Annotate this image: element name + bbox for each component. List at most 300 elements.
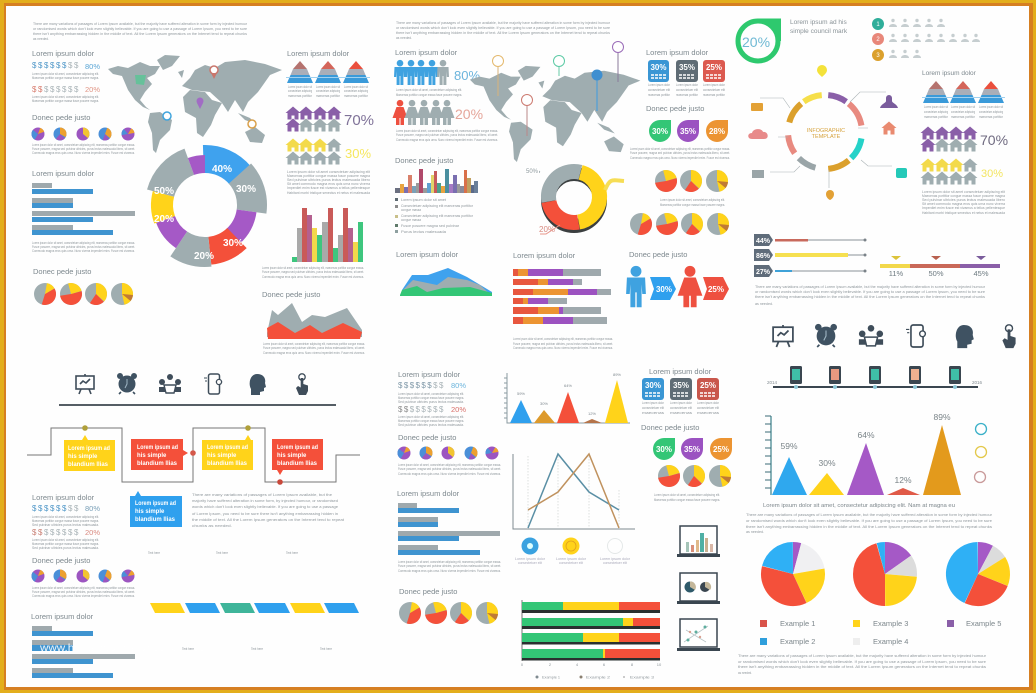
caption: [630, 147, 730, 160]
caption: [513, 337, 613, 350]
badge captions: [642, 401, 720, 415]
badge captions: maecenas porttitor: [676, 93, 699, 97]
3D donut chart: 20%: [539, 225, 555, 234]
circular infographic: INFOGRAPHIC: [807, 128, 845, 134]
caption: or randomised words which don't look even slightly believable. If you are going to use a passage of Lorem Ipsum, you need to be sure: [755, 290, 985, 294]
pyramid captions: Lorem ipsum dolor sit: [288, 85, 312, 89]
subtitle: simple council mark: [790, 28, 848, 35]
percent badges: [648, 60, 725, 82]
caption: Maecenas porttitor congue massa fusce posuere magna.: [32, 76, 99, 80]
currency row red: [398, 405, 466, 414]
intro text: as needed.: [396, 36, 412, 40]
caption: Lorem ipsum dolor sit amet, consectetuer adipiscing elit, maecenas porttitor congue massa.: [398, 560, 501, 564]
text block: or randomised words which don't look even slightly believable. If you are going to use a passage of Lorem Ipsum, you need to be sure: [746, 519, 992, 523]
caption: [263, 342, 365, 355]
badge captions: consectetuer elit: [697, 406, 719, 410]
stacked bar legend: Example 3: [630, 676, 654, 680]
horizontal stacked bars: 2: [549, 662, 552, 667]
caption: Lorem ipsum dolor sit amet, consectetuer adipiscing elit.: [32, 72, 99, 76]
round percent badges: 35%: [684, 445, 700, 454]
caption: Habitant morbi tristique senectus et netus et malesuada: [922, 211, 1005, 215]
round icons with captions: consectetuer elit: [603, 561, 627, 565]
caption: Fusce posuere, magna sed pulvinar ultricies, purus lectus malesuada libero, sit amet.: [32, 590, 135, 594]
currency row red 20%: [32, 85, 100, 94]
caption: [32, 515, 99, 527]
panel: top middle infographic: [392, 21, 730, 350]
pyramid captions: [288, 85, 369, 98]
caption: Maecenas porttitor congue massa fusce posuere magna.: [396, 93, 462, 97]
progress bars with tags: [754, 234, 866, 277]
bullet legend: congue massa: [401, 218, 421, 222]
caption: Lorem ipsum dolor sit amet, consectetuer adipiscing elit.: [32, 95, 99, 99]
pie legend: [760, 619, 1001, 646]
process box 2: [131, 439, 188, 470]
process box 3: [202, 435, 253, 470]
caption: Fusce posuere, magna sed pulvinar ultricies, purus lectus malesuada libero, sit amet.: [262, 270, 364, 274]
laptop with pies: [677, 573, 720, 604]
pyramid captions: consectetuer adipiscing: [316, 89, 340, 93]
badge captions: maecenas: [642, 411, 664, 415]
caption: Sed pulvinar ultricies purus lectus malesuada.: [32, 546, 99, 550]
caption: Lorem ipsum dolor sit amet, consectetuer adipiscing elit.: [32, 538, 99, 542]
icon row: [76, 373, 308, 395]
badge captions: Lorem ipsum dolor: [648, 83, 671, 87]
process box 3: blandium llias: [207, 461, 248, 467]
caption: Fusce posuere, magna sed pulvinar ultricies, purus lectus malesuada libero, sit amet.: [630, 151, 730, 155]
heading: people: Lorem ipsum dolor: [395, 48, 458, 57]
caption: Maecenas porttitor congue massa fusce posuere magna.: [32, 99, 99, 103]
pyramid captions: [924, 105, 1004, 119]
bullet legend: [395, 198, 474, 234]
badge captions: Lorem ipsum dolor: [676, 83, 699, 87]
pyramid captions: consectetuer adipiscing: [979, 110, 1003, 114]
badge captions: Lorem ipsum dolor: [703, 83, 726, 87]
caption: Sed pulvinar ultricies purus lectus malesuada libero: [287, 178, 370, 182]
numbered people rows: 3: [876, 53, 880, 59]
text block: [738, 654, 987, 675]
pyramid captions: maecenas porttitor: [344, 94, 369, 98]
heading: currency stats: Lorem ipsum dolor: [32, 49, 95, 58]
currency row blue: 80%: [451, 381, 466, 390]
caption: Commodo magna eros quis urna. Nunc viverra imperdiet enim. Fusce est vivamus.: [398, 569, 501, 573]
progress bars with tags: 27%: [756, 269, 771, 276]
caption: Imperdiet enim fusce est vivamus a tellus pellentesque: [922, 206, 1005, 210]
caption: Maecenas porttitor congue massa fusce posuere magna: [287, 174, 370, 178]
phone timeline: 2014: [767, 380, 778, 385]
currency row red: $ $ $ $ $ $ $ $: [398, 405, 444, 414]
currency row blue: $ $ $ $ $ $ $ $: [398, 381, 444, 390]
triangle chart: 64%: [564, 383, 572, 388]
process box 2: his simple: [137, 453, 167, 459]
bar chart colored: [292, 208, 363, 262]
pie legend: Example 2: [780, 637, 815, 646]
small grouped bar chart: [395, 168, 478, 193]
caption: [32, 72, 99, 80]
subtitle: Lorem ipsum ad his: [790, 19, 847, 26]
intro text: or randomised words which don't look even slightly believable. If you are going to use a passage of Lorem Ipsum, you need to be sure: [33, 27, 247, 31]
process box 3: his simple: [207, 453, 237, 459]
house pictogram 70%: 70%: [980, 132, 1008, 148]
caption: Fusce posuere, magna sed pulvinar ultricies, purus lectus malesuada libero, sit amet.: [396, 133, 498, 137]
caption: Maecenas porttitor congue massa fusce posuere magna.: [660, 203, 725, 207]
icons around circle: [748, 65, 907, 200]
pyramid captions: Lorem ipsum dolor sit: [344, 85, 368, 89]
pie row lower: [630, 213, 729, 235]
intro text: [396, 21, 611, 40]
timeline labels: [148, 551, 332, 651]
process box 5: blandium llias: [135, 517, 176, 523]
pyramid captions: consectetuer adipiscing: [924, 110, 948, 114]
pyramid icons: [286, 61, 370, 83]
stacked bar legend: Example 1: [542, 676, 560, 680]
pie row: [658, 465, 731, 487]
timeline labels: Text here: [182, 647, 194, 651]
bullet legend: Consectetuer adipiscing elit maecenas porttitor: [401, 214, 474, 218]
small pie row: [398, 446, 498, 460]
caption: Lorem ipsum dolor sit amet, consectetuer adipiscing elit, maecenas porttitor congue massa.: [398, 463, 501, 467]
currency row red: $ $ $ $ $ $ $ $: [32, 528, 79, 537]
process dots: [82, 425, 283, 485]
horizontal stacked bars: 4: [576, 662, 579, 667]
bullet legend: Fusce posuere magna sed pulvinar: [401, 224, 460, 228]
caption: Lorem ipsum dolor sit amet, consectetuer adipiscing elit, maecenas porttitor congue massa.: [263, 342, 365, 346]
heading: badges: Lorem ipsum dolor: [646, 48, 709, 57]
people pictogram 80%: [394, 60, 480, 85]
bar chart: [32, 626, 135, 678]
gender figures with chevrons: [626, 266, 729, 307]
pyramid captions: maecenas porttitor: [316, 94, 341, 98]
pyramid captions: Lorem ipsum dolor sit: [979, 105, 1003, 109]
currency row red: 20%: [85, 528, 100, 537]
caption: Habitant morbi tristique senectus et netus et malesuada: [287, 191, 370, 195]
stacked bar legend: [536, 676, 654, 680]
house pictogram 30%: [286, 138, 371, 164]
heading: big pies: Donec pede justo: [399, 587, 457, 596]
phone timeline: [767, 366, 983, 389]
laptop with bars: [677, 526, 720, 557]
donut chart: 40%: [212, 164, 232, 175]
text block: majority have suffered alteration in some form, by injected humour, or randomised: [192, 498, 338, 503]
caption: Lorem ipsum dolor sit amet consectetuer adipiscing elit: [922, 190, 1005, 194]
caption: Lorem ipsum dolor sit amet, consectetuer adipiscing elit.: [398, 392, 464, 396]
text block: There are many variations of passages of Lorem Ipsum available, but the majority have suffered alteration in some form by injected humour: [746, 513, 993, 517]
round percent badges: [653, 438, 732, 460]
currency row blue 80%: $ $ $ $ $ $ $ $: [32, 61, 79, 70]
heading: small bars: Donec pede justo: [395, 156, 453, 165]
icon row: [773, 324, 1016, 348]
caption: Maecenas porttitor congue massa fusce posuere magna.: [32, 542, 99, 546]
bullet legend: Purus lectus malesuada: [401, 230, 446, 234]
pyramid captions: maecenas porttitor: [288, 94, 313, 98]
caption: [654, 493, 720, 502]
heading: small pies: Donec pede justo: [398, 433, 456, 442]
caption: [32, 241, 135, 253]
legend circles: [974, 424, 986, 482]
currency row blue 80%: 80%: [85, 62, 100, 71]
currency row blue: 80%: [85, 504, 100, 513]
horizontal stacked bars: 6: [603, 662, 606, 667]
round percent badges: 35%: [680, 127, 696, 136]
bullet legend: Consectetuer adipiscing elit maecenas porttitor: [401, 204, 474, 208]
segmented bar: 11%: [889, 269, 904, 278]
area chart: [267, 303, 362, 339]
caption: [396, 129, 498, 142]
round icons with captions: consectetuer elit: [559, 561, 583, 565]
process box 2: blandium llias: [137, 461, 178, 467]
caption: [262, 266, 364, 279]
circular infographic: [760, 80, 892, 188]
process box 3: Lorem ipsum ad: [207, 445, 248, 451]
percent badges: 35%: [679, 63, 695, 72]
panel: bottom left infographic: [27, 373, 360, 678]
text block: There are many variations of passages of Lorem Ipsum available, but the: [192, 492, 333, 497]
heading: gender: Donec pede justo: [629, 250, 687, 259]
process box 5: his simple: [135, 509, 165, 515]
caption: [32, 143, 135, 155]
stacked area chart: [400, 268, 492, 296]
badge captions: maecenas porttitor: [648, 93, 671, 97]
bullet legend: Lorem ipsum dolor sit amet: [401, 198, 446, 202]
caption: Sit amet commodo magna eros quis urna nunc viverra: [922, 202, 1005, 206]
intro text: as needed.: [33, 37, 49, 41]
triangle chart: 64%: [857, 430, 875, 440]
timeline labels: Text here: [286, 551, 298, 555]
heading: pyramids: Lorem ipsum dolor: [287, 49, 350, 58]
caption: Sed pulvinar ultricies purus lectus malesuada.: [32, 523, 99, 527]
caption: there isn't anything embarrassing hidden in the middle of text. All the Lorem Ipsum generators on the Internet tend to repeat chunks: [755, 295, 985, 299]
process box 1: blandium llias: [68, 462, 109, 468]
caption: Commodo magna eros quis urna. Nunc viverra imperdiet enim. Fusce est vivamus.: [513, 346, 613, 350]
green percent ring: 20%: [742, 34, 770, 50]
text block: the middle of text. All the Lorem Ipsum generators on the Internet tend to repeat: [192, 517, 345, 522]
caption: Fusce posuere, magna sed pulvinar ultricies, purus lectus malesuada libero, sit amet.: [513, 342, 613, 346]
triangle chart: [504, 372, 630, 423]
progress bars with tags: 86%: [756, 253, 771, 260]
panel: top left infographic: [32, 22, 374, 355]
caption: Fusce posuere, magna sed pulvinar ultricies, purus lectus malesuada libero, sit amet.: [32, 245, 135, 249]
pyramid captions: maecenas porttitor: [924, 115, 949, 119]
round icons with captions: Lorem ipsum dolor: [515, 557, 546, 561]
panel: top right infographic: [738, 18, 1008, 306]
bar chart: [398, 503, 500, 555]
parallelogram timeline: [150, 603, 359, 613]
caption: Fusce posuere, magna sed pulvinar ultricies, purus lectus malesuada libero, sit amet.: [398, 564, 501, 568]
caption: Fusce posuere, magna sed pulvinar ultricies, purus lectus malesuada libero, sit amet.: [398, 467, 501, 471]
house pictogram 70%: [920, 126, 1008, 152]
numbered people rows: 2: [876, 37, 880, 43]
donut chart: 30%: [236, 184, 256, 195]
text block: as needed.: [746, 530, 764, 534]
caption: [32, 95, 99, 103]
caption: [398, 415, 464, 427]
percent badges: 30%: [650, 63, 667, 72]
currency row red: 20%: [451, 405, 466, 414]
gender figures with chevrons: 25%: [708, 285, 724, 294]
percent badges: 30%: [645, 381, 661, 390]
triangle chart: [765, 412, 961, 495]
caption: Sed pulvinar ultricies purus lectus malesuada.: [398, 423, 464, 427]
process box 1: [64, 435, 115, 471]
process box 4: [272, 439, 323, 475]
pyramid captions: maecenas porttitor: [979, 115, 1004, 119]
people pictogram 80%: 80%: [454, 68, 480, 83]
heading: area chart: Lorem ipsum dolor: [396, 250, 459, 259]
pie legend: Example 5: [966, 619, 1001, 628]
round icons with captions: Lorem ipsum dolor: [556, 557, 587, 561]
text block: there isn't anything embarrassing hidden in the middle of text. All the Lorem Ipsum generators on the Internet tend to repeat chunks: [746, 525, 992, 529]
heading: currency: Lorem ipsum dolor: [398, 370, 461, 379]
world map with pins: [470, 42, 640, 162]
caption: Commodo magna eros quis urna. Nunc viverra imperdiet enim. Fusce est vivamus.: [32, 249, 135, 253]
caption: [922, 190, 1005, 215]
caption: [398, 463, 501, 476]
caption: Maecenas porttitor congue massa fusce posuere magna.: [32, 519, 99, 523]
triangle chart: 89%: [613, 372, 621, 377]
caption: Commodo magna eros quis urna. Nunc viverra imperdiet enim. Fusce est vivamus.: [398, 472, 501, 476]
small pie row: [32, 128, 134, 140]
currency row red 20%: 20%: [85, 85, 100, 94]
caption: Commodo magna eros quis urna. Nunc viverra imperdiet enim. Fusce est vivamus.: [396, 138, 498, 142]
segmented bar: 45%: [973, 269, 989, 278]
pie legend: Example 1: [780, 619, 815, 628]
heading: currency: Lorem ipsum dolor: [32, 493, 95, 502]
triangle chart: 89%: [933, 412, 951, 422]
text block: There are many variations of passages of Lorem Ipsum available, but the majority have suffered alteration in some form by injected humour: [738, 654, 987, 658]
round percent badges: 30%: [656, 445, 672, 454]
pyramid captions: maecenas porttitor: [951, 115, 976, 119]
percent badges: 25%: [700, 381, 716, 390]
round percent badges: 28%: [709, 127, 725, 136]
caption: Lorem ipsum dolor sit amet, consectetuer adipiscing elit, maecenas porttitor congue massa.: [513, 337, 613, 341]
currency row blue: $ $ $ $ $ $ $ $: [32, 504, 79, 513]
process box 5: [130, 491, 182, 527]
text block: there isn't anything embarrassing hidden in the middle of text. All the Lorem Ipsum generators on the Internet tend to repeat chunks: [738, 665, 986, 669]
horizontal stacked bars: 8: [631, 662, 634, 667]
triangle chart: 30%: [818, 458, 836, 468]
caption: [398, 560, 501, 573]
world map with pins: [108, 55, 282, 153]
donut chart: [139, 139, 271, 271]
round percent badges: 30%: [652, 127, 668, 136]
house pictogram 30%: 30%: [345, 146, 371, 161]
process box 4: Lorem ipsum ad: [277, 445, 318, 451]
subtitle: [790, 19, 848, 35]
horizontal stacked bars: 10: [657, 662, 662, 667]
small pie row: [32, 570, 134, 582]
chart caption: Lorem ipsum dolor sit amet, consectetur adipiscing elit. Nam at magna eu: [763, 503, 955, 509]
house pictogram 30%: [920, 158, 1003, 184]
pyramid captions: Lorem ipsum dolor sit: [924, 105, 948, 109]
caption: Lorem ipsum dolor sit amet, consectetuer adipiscing elit.: [654, 493, 720, 497]
intro text: There are many variations of passages of Lorem Ipsum available, but the majority have suffered alteration in some form by injected humour: [33, 22, 248, 26]
caption: Lorem ipsum dolor sit amet, consectetuer adipiscing elit, maecenas porttitor congue massa.: [32, 143, 135, 147]
3D donut chart: [525, 166, 624, 234]
round percent badges: 25%: [713, 445, 729, 454]
caption: There are many variations of passages of Lorem Ipsum available, but the majority have suffered alteration in some form by injected humour: [755, 285, 986, 289]
badge captions: consectetuer elit: [703, 88, 725, 92]
badge captions: maecenas porttitor: [703, 93, 726, 97]
process step line: [27, 428, 360, 482]
caption: Sed pulvinar ultricies purus lectus malesuada.: [398, 400, 464, 404]
round icons with captions: consectetuer elit: [518, 561, 542, 565]
caption: Maecenas porttitor congue massa fusce posuere magna.: [398, 396, 464, 400]
caption: [755, 285, 986, 306]
pie row upper: [655, 170, 728, 192]
caption: Lorem ipsum dolor sit amet, consectetuer adipiscing elit, maecenas porttitor congue massa.: [262, 266, 364, 270]
bar chart: [32, 183, 135, 235]
pyramid captions: consectetuer adipiscing: [951, 110, 975, 114]
heading: badges: Lorem ipsum dolor: [649, 367, 712, 376]
stacked bar chart: [513, 269, 611, 324]
pie chart 3: [956, 552, 1000, 596]
process box 4: his simple: [277, 453, 307, 459]
currency row blue: [398, 381, 466, 390]
triangle chart: 30%: [540, 401, 548, 406]
triangle chart: 59%: [780, 441, 798, 451]
currency row blue 80%: [32, 61, 100, 71]
text block: as needed.: [738, 671, 752, 675]
heading: small pies: Donec pede justo: [32, 556, 90, 565]
currency row red: [32, 528, 100, 537]
house pictogram 70%: [286, 106, 374, 132]
caption: Commodo magna eros quis urna. Nunc viverra imperdiet enim. Fusce est vivamus.: [32, 594, 135, 598]
caption: Lorem ipsum dolor sit amet, consectetuer adipiscing elit, maecenas porttitor congue massa.: [396, 129, 498, 133]
pyramid captions: consectetuer adipiscing: [344, 89, 368, 93]
heading: bars: Lorem ipsum dolor: [31, 612, 94, 621]
segmented bar: 50%: [928, 269, 944, 278]
process box 4: blandium llias: [277, 461, 318, 467]
text block: or randomised words which don't look even slightly believable. If you are going to use a passage of Lorem Ipsum, you need to be sure: [738, 660, 986, 664]
triangle chart: 12%: [588, 411, 596, 416]
heading: pyramids: Lorem ipsum dolor: [922, 70, 977, 77]
caption: Sed pulvinar ultricies purus lectus malesuada libero: [922, 198, 1005, 202]
panel: bottom middle infographic: [397, 367, 732, 680]
laptop with scatter: [677, 619, 720, 651]
caption: Imperdiet enim fusce est vivamus a tellus pellentesque: [287, 186, 370, 190]
numbered people rows: 1: [876, 22, 880, 28]
caption: Lorem ipsum dolor sit amet, consectetuer adipiscing elit, maecenas porttitor congue massa.: [32, 586, 135, 590]
badge captions: consectetuer elit: [676, 88, 698, 92]
process box 2: Lorem ipsum ad: [137, 445, 178, 451]
caption: [32, 586, 135, 598]
badge captions: maecenas: [697, 411, 719, 415]
process box 1: his simple: [68, 454, 98, 460]
people pictogram 20%: [392, 100, 483, 125]
pie legend: Example 4: [873, 637, 908, 646]
pyramid captions: Lorem ipsum dolor sit: [951, 105, 975, 109]
percent badges: 35%: [673, 381, 689, 390]
badge captions: Lorem ipsum dolor: [642, 401, 665, 405]
pie row: [399, 602, 498, 624]
3D donut chart: 50%: [526, 169, 539, 175]
heading: big pies: Donec pede justo: [33, 267, 91, 276]
pyramid captions: consectetuer adipiscing: [288, 89, 312, 93]
badge captions: [648, 83, 726, 97]
triangle chart: 59%: [517, 391, 525, 396]
circular infographic: TEMPLATE: [812, 134, 841, 140]
caption: Lorem ipsum dolor sit amet, consectetuer adipiscing elit, maecenas porttitor congue massa.: [32, 241, 135, 245]
caption: [396, 88, 462, 97]
caption: Lorem ipsum dolor sit amet, consectetuer adipiscing elit, maecenas porttitor congue massa.: [630, 147, 730, 151]
caption: [398, 392, 464, 404]
pie chart 1: [772, 553, 814, 595]
caption: Commodo magna eros quis urna. Nunc viverra imperdiet enim. Fusce est vivamus.: [630, 156, 730, 160]
badge captions: consectetuer elit: [642, 406, 664, 410]
caption: [287, 170, 370, 195]
pie chart 2: [863, 552, 907, 596]
heading: area chart: Donec pede justo: [262, 290, 320, 299]
badge captions: consectetuer elit: [648, 88, 670, 92]
